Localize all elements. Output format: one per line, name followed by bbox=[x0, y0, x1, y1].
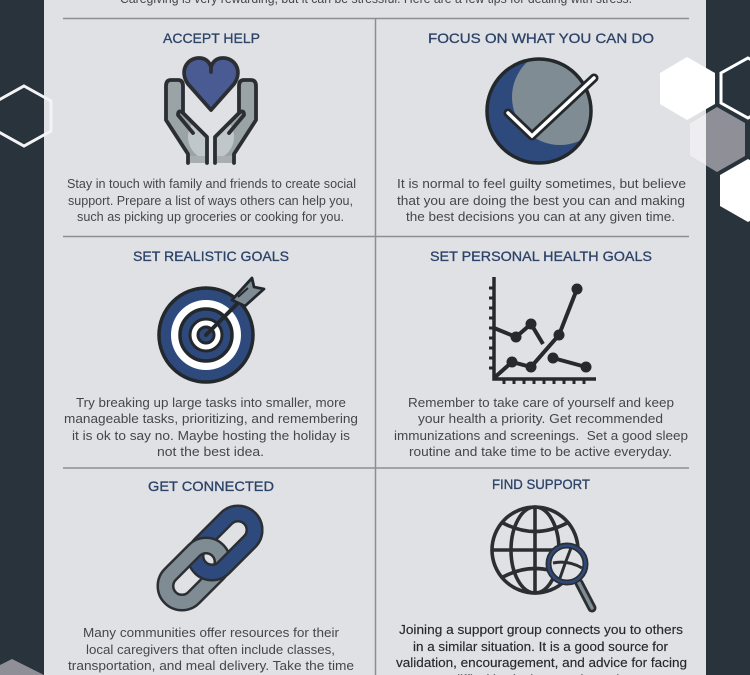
body text: focus: It is normal to feel guilty sometimes, but believe bbox=[397, 176, 686, 191]
body text: realistic goals: manageable tasks, prioritizing, and remembering bbox=[64, 411, 358, 426]
body text: realistic goals: Try breaking up large tasks into smaller, more bbox=[76, 395, 346, 410]
body text: get connected: local caregivers that often include classes, bbox=[86, 642, 335, 657]
body text: find support: in a similar situation. It is a good source for bbox=[413, 639, 669, 654]
body text: personal health goals bbox=[394, 395, 688, 459]
body text: get connected: transportation, and meal delivery. Take the time bbox=[68, 658, 354, 673]
body text: personal health goals: immunizations and screenings. Set a good sleep bbox=[394, 428, 688, 443]
heading: personal health goals: SET PERSONAL HEALTH GOALS bbox=[430, 248, 652, 264]
body text: personal health goals: routine and take time to be active everyday. bbox=[409, 444, 672, 459]
heading: accept help: ACCEPT HELP bbox=[163, 30, 260, 46]
body text: find support: Joining a support group connects you to others bbox=[399, 622, 684, 637]
hexagon: white right bottom bbox=[720, 159, 750, 222]
body text: focus bbox=[397, 176, 686, 224]
panel: find support bbox=[396, 476, 687, 675]
icon: target with arrow bbox=[159, 278, 264, 382]
hexagon: white right top bbox=[660, 57, 715, 120]
body text: accept help bbox=[67, 176, 356, 224]
body text: accept help: support. Prepare a list of ways others can help you, bbox=[68, 193, 353, 208]
heading: realistic goals: SET REALISTIC GOALS bbox=[133, 248, 289, 264]
body text: find support: validation, encouragement, and advice for facing bbox=[396, 655, 687, 670]
panel: get connected bbox=[68, 478, 354, 673]
hexagon: grey bottom left bbox=[0, 659, 44, 675]
icon: hands holding heart bbox=[160, 58, 262, 167]
icon: globe with magnifier bbox=[492, 507, 592, 608]
body text: focus: that you are doing the best you can and making bbox=[397, 193, 685, 208]
body text: realistic goals bbox=[64, 395, 358, 459]
body text: accept help: such as picking up groceries or cooking for you. bbox=[77, 209, 344, 224]
icon: line chart bbox=[489, 277, 596, 384]
panel: set realistic goals bbox=[64, 248, 358, 459]
hexagon: white outline left bbox=[0, 86, 51, 146]
body text: personal health goals: Remember to take care of yourself and keep bbox=[408, 395, 674, 410]
heading: find support: FIND SUPPORT bbox=[492, 476, 590, 492]
icon: check circle bbox=[485, 57, 598, 165]
hexagon: outline right bbox=[721, 58, 750, 118]
body text: realistic goals: not the best idea. bbox=[157, 444, 264, 459]
panel: focus on what you can do bbox=[397, 30, 686, 224]
body text: get connected bbox=[68, 625, 354, 673]
body text: realistic goals: it is ok to say no. Maybe hosting the holiday is bbox=[72, 428, 351, 443]
icon: chain link bbox=[159, 507, 261, 609]
hexagon: grey right bbox=[690, 107, 745, 172]
heading: get connected: GET CONNECTED bbox=[148, 478, 274, 494]
body text: personal health goals: your health a priority. Get recommended bbox=[418, 411, 663, 426]
body text: accept help: Stay in touch with family and friends to create social bbox=[67, 176, 356, 191]
panel: accept help bbox=[67, 30, 356, 224]
body text: find support bbox=[396, 622, 687, 675]
body text: get connected: Many communities offer resources for their bbox=[83, 625, 340, 640]
panel: set personal health goals bbox=[394, 248, 688, 459]
heading: focus: FOCUS ON WHAT YOU CAN DO bbox=[428, 30, 654, 46]
body text: focus: the best decisions you can at any given time. bbox=[406, 209, 675, 224]
